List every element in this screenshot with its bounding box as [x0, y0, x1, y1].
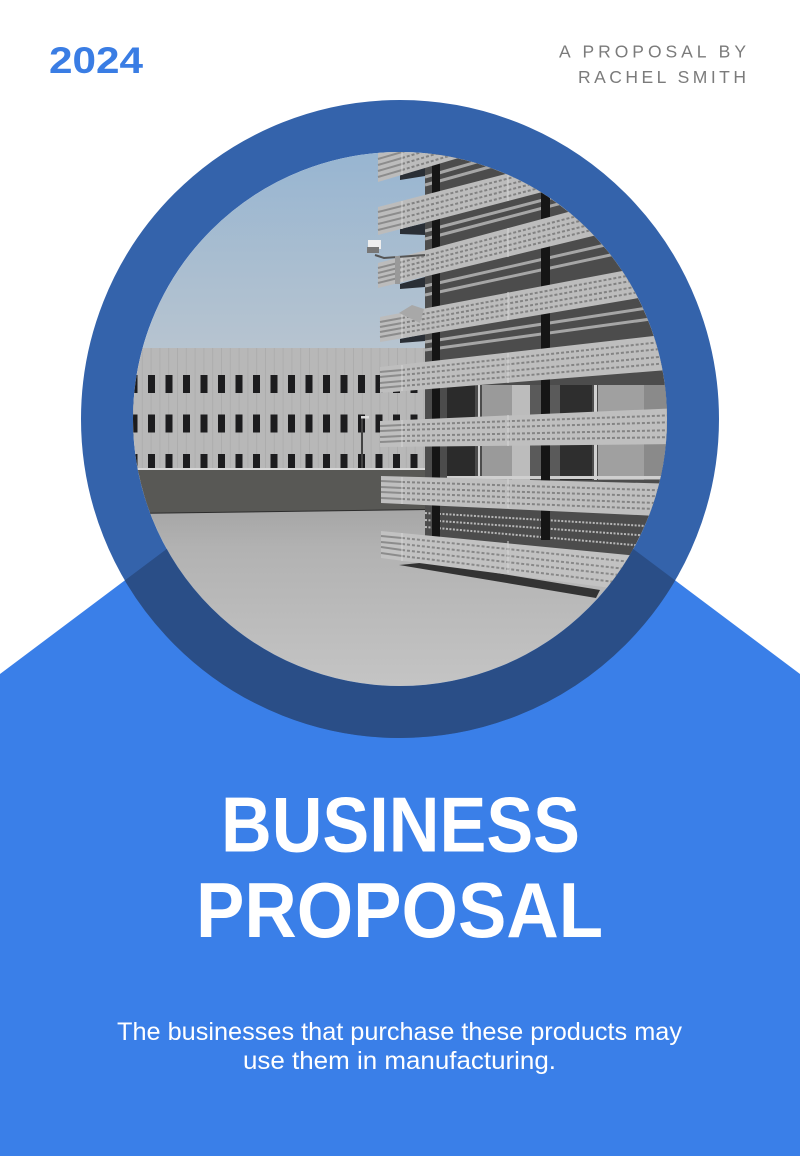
security camera: [367, 240, 425, 284]
slat 7: [381, 476, 680, 517]
shadow under building: [399, 562, 600, 598]
concrete wall: [130, 468, 430, 515]
slat 3: [378, 212, 594, 288]
proposal author: [559, 42, 746, 87]
main title: BUSINESS: [221, 780, 580, 868]
ring overlap with panel: [124, 549, 676, 738]
slat 4: [380, 271, 638, 342]
year: 2024: [49, 40, 143, 81]
slat 1: [378, 152, 458, 182]
proposal author: A PROPOSAL BY: [559, 42, 746, 62]
blue ring: [107, 126, 693, 712]
slat 2: [378, 174, 541, 235]
back building: [130, 348, 430, 470]
sky: [130, 150, 430, 350]
front building: [378, 152, 667, 598]
blue house-shaped panel: [0, 374, 800, 1156]
floodlight: [399, 305, 424, 323]
louvers between slats: [424, 162, 648, 352]
main title: PROPOSAL: [196, 866, 603, 954]
concrete ground: [150, 510, 618, 686]
dark back facade: [425, 153, 667, 584]
slat 8: [380, 531, 630, 588]
circular building photo: [133, 152, 667, 686]
slat 5: [380, 336, 662, 393]
dark mesh under slats: [400, 165, 425, 343]
slat 6: [380, 408, 680, 447]
windows: [447, 385, 677, 480]
description: use them in manufacturing.: [243, 1047, 556, 1075]
description: The businesses that purchase these products may: [117, 1018, 682, 1046]
columns: [432, 150, 550, 545]
description: [117, 1018, 682, 1075]
main title: [196, 780, 603, 954]
proposal author: RACHEL SMITH: [578, 67, 746, 87]
